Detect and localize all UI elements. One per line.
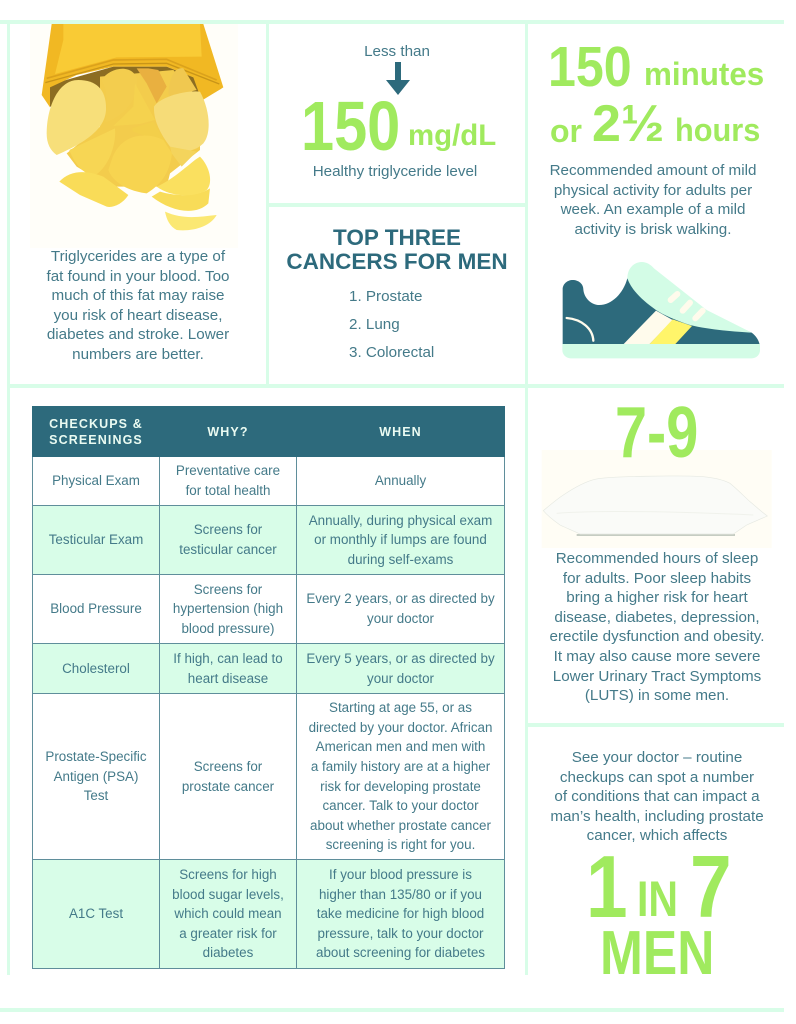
table: checkups and screenings: Cholesterol <box>62 661 130 676</box>
text: physical activity <box>550 162 756 238</box>
list: cancers: 1. Prostate <box>349 288 422 305</box>
text: sleep description: Recommended hours of sleep <box>556 550 758 567</box>
text: triglycerides description: numbers are better. <box>72 346 204 363</box>
table: checkups and screenings: CHECKUPS & <box>49 416 143 430</box>
stat: 150 mg/dL: 150 <box>301 87 400 165</box>
table: checkups and screenings: Blood Pressure <box>50 601 142 616</box>
table: checkups and screenings: Antigen (PSA) <box>54 769 138 784</box>
table: checkups and screenings: higher than 135/80 or if you <box>319 887 482 902</box>
text: physical activity: week. An example of a mild <box>561 201 745 218</box>
table: checkups and screenings: Every 2 years, or as directed by <box>306 591 495 606</box>
table: checkups and screenings: your doctor <box>367 611 434 626</box>
table: checkups and screenings: Screens for <box>194 522 262 537</box>
stat: 150 minutes or 2 1/2 hours <box>548 35 764 153</box>
table: checkups and screenings: a greater risk for <box>179 926 277 941</box>
table: checkups and screenings: blood pressure) <box>181 621 275 636</box>
table: checkups and screenings: or monthly if lumps are found <box>314 532 487 547</box>
icon: sneaker <box>562 262 760 358</box>
table: checkups and screenings: A1C Test <box>69 906 123 921</box>
text: physical activity: physical activity for adults per <box>554 182 752 199</box>
table: checkups and screenings: Annually, during physical exam <box>309 513 492 528</box>
stat: 1 in 7 men: MEN <box>600 919 714 988</box>
stat: 150 minutes or 2 1/2 hours: 150 <box>548 35 632 99</box>
text: triglycerides description: Triglycerides are a type of <box>51 248 225 265</box>
table: checkups and screenings: Testicular Exam <box>49 532 143 547</box>
table: checkups and screenings: American men and men with <box>316 739 485 754</box>
table: checkups and screenings: risk for developing prostate <box>320 778 481 794</box>
image: bag of potato chips <box>42 24 224 230</box>
list: cancers: 3. Colorectal <box>349 344 434 361</box>
table: checkups and screenings: Starting at age 55, or as <box>329 700 472 715</box>
table: checkups and screenings: during self-exams <box>348 552 453 567</box>
table: checkups and screenings: testicular cancer <box>179 542 277 557</box>
table: checkups and screenings: pressure, talk to your doctor <box>318 926 483 941</box>
table: checkups and screenings: cancer. Talk to your doctor <box>322 798 479 813</box>
text: see your doctor: man’s health, including prostate <box>550 808 764 825</box>
table: checkups and screenings: heart disease <box>188 670 268 686</box>
label: less than: Less than <box>364 43 430 60</box>
table: checkups and screenings: which could mean <box>174 906 282 921</box>
text: physical activity: Recommended amount of mild <box>550 162 756 179</box>
table: checkups and screenings: take medicine for high blood <box>317 906 484 921</box>
text: sleep description <box>550 550 764 704</box>
table: checkups and screenings: Annually <box>375 473 426 488</box>
table: checkups and screenings: Prostate-Specific <box>45 749 147 764</box>
text: triglycerides description: you risk of heart disease, <box>54 307 222 324</box>
icon: down arrow <box>386 62 410 95</box>
table: checkups and screenings: directed by your doctor. African <box>309 720 492 735</box>
table: checkups and screenings: If high, can lead to <box>173 651 283 666</box>
stat: 1 in 7 men: 7 <box>690 837 732 936</box>
table: checkups and screenings: diabetes <box>203 945 253 960</box>
table: checkups and screenings: Preventative care <box>176 463 280 478</box>
table: checkups and screenings: SCREENINGS <box>49 432 143 446</box>
image: pillow <box>542 450 772 548</box>
table: checkups and screenings: Screens for <box>194 582 262 597</box>
caption: healthy triglyceride level: Healthy triglyceride level <box>313 163 477 180</box>
table: checkups and screenings: Screens for <box>194 759 262 774</box>
table: checkups and screenings: screening is right for you. <box>326 837 475 852</box>
heading: top three cancers: CANCERS FOR MEN <box>286 249 508 274</box>
stat: 150 minutes or 2 1/2 hours: 2½ <box>592 95 664 153</box>
text: sleep description: erectile dysfunction and obesity. <box>550 628 764 645</box>
text: see your doctor: cancer, which affects <box>587 827 727 844</box>
list: cancers: 2. Lung <box>349 316 400 333</box>
stat: 150 minutes or 2 1/2 hours: minutes <box>644 56 764 92</box>
table: checkups and screenings: WHEN <box>379 424 422 438</box>
table: checkups and screenings: hypertension (high <box>173 601 283 616</box>
text: see your doctor: of conditions that can impact a <box>554 788 760 805</box>
text: triglycerides description: fat found in your blood. Too <box>47 268 229 285</box>
table: checkups and screenings: your doctor <box>367 670 434 686</box>
stat: 150 mg/dL: mg/dL <box>408 119 496 152</box>
stat: 150 minutes or 2 1/2 hours: hours <box>675 112 760 148</box>
table: checkups and screenings: WHY? <box>207 424 249 438</box>
stat: 1 in 7 men: IN <box>637 871 678 927</box>
table: checkups and screenings: Physical Exam <box>52 473 140 488</box>
text: triglycerides description: diabetes and stroke. Lower <box>47 326 229 343</box>
table: checkups and screenings <box>32 406 505 969</box>
stat: 1 in 7 men: 1 <box>586 837 628 936</box>
table: checkups and screenings: Screens for high <box>179 867 277 882</box>
text: sleep description: It may also cause more severe <box>554 648 760 665</box>
text: triglycerides description: much of this fat may raise <box>51 287 225 304</box>
list: cancers <box>349 288 434 361</box>
stat: 7-9 hours: 7-9 <box>615 393 698 473</box>
text: see your doctor: See your doctor – routine <box>572 749 742 766</box>
table: checkups and screenings: prostate cancer <box>182 778 274 794</box>
text: see your doctor <box>550 749 764 844</box>
text: sleep description: for adults. Poor sleep habits <box>563 570 751 587</box>
table: checkups and screenings: Every 5 years, or as directed by <box>306 651 495 666</box>
table: checkups and screenings: for total health <box>186 483 270 498</box>
table: checkups and screenings: Test <box>84 788 108 803</box>
stat: 1 in 7 men <box>586 837 732 988</box>
text: sleep description: (LUTS) in some men. <box>585 687 729 704</box>
stat: 150 mg/dL <box>301 87 496 165</box>
text: triglycerides description <box>46 248 229 363</box>
table: checkups and screenings: If your blood pressure is <box>329 867 472 882</box>
stat: 150 minutes or 2 1/2 hours: or <box>550 113 582 149</box>
text: see your doctor: checkups can spot a number <box>560 769 754 786</box>
table: checkups and screenings: a family history are at a higher <box>311 759 490 774</box>
table: checkups and screenings: blood sugar levels, <box>172 887 284 902</box>
table: checkups and screenings: about whether prostate cancer <box>310 818 491 833</box>
table: checkups and screenings: about screening for diabetes <box>316 945 485 960</box>
text: physical activity: activity is brisk walking. <box>574 221 731 238</box>
text: sleep description: bring a higher risk for heart <box>566 589 748 606</box>
text: sleep description: Lower Urinary Tract Symptoms <box>553 668 761 685</box>
text: sleep description: disease, diabetes, depression, <box>554 609 760 626</box>
heading: top three cancers <box>286 225 508 274</box>
heading: top three cancers: TOP THREE <box>333 225 461 250</box>
